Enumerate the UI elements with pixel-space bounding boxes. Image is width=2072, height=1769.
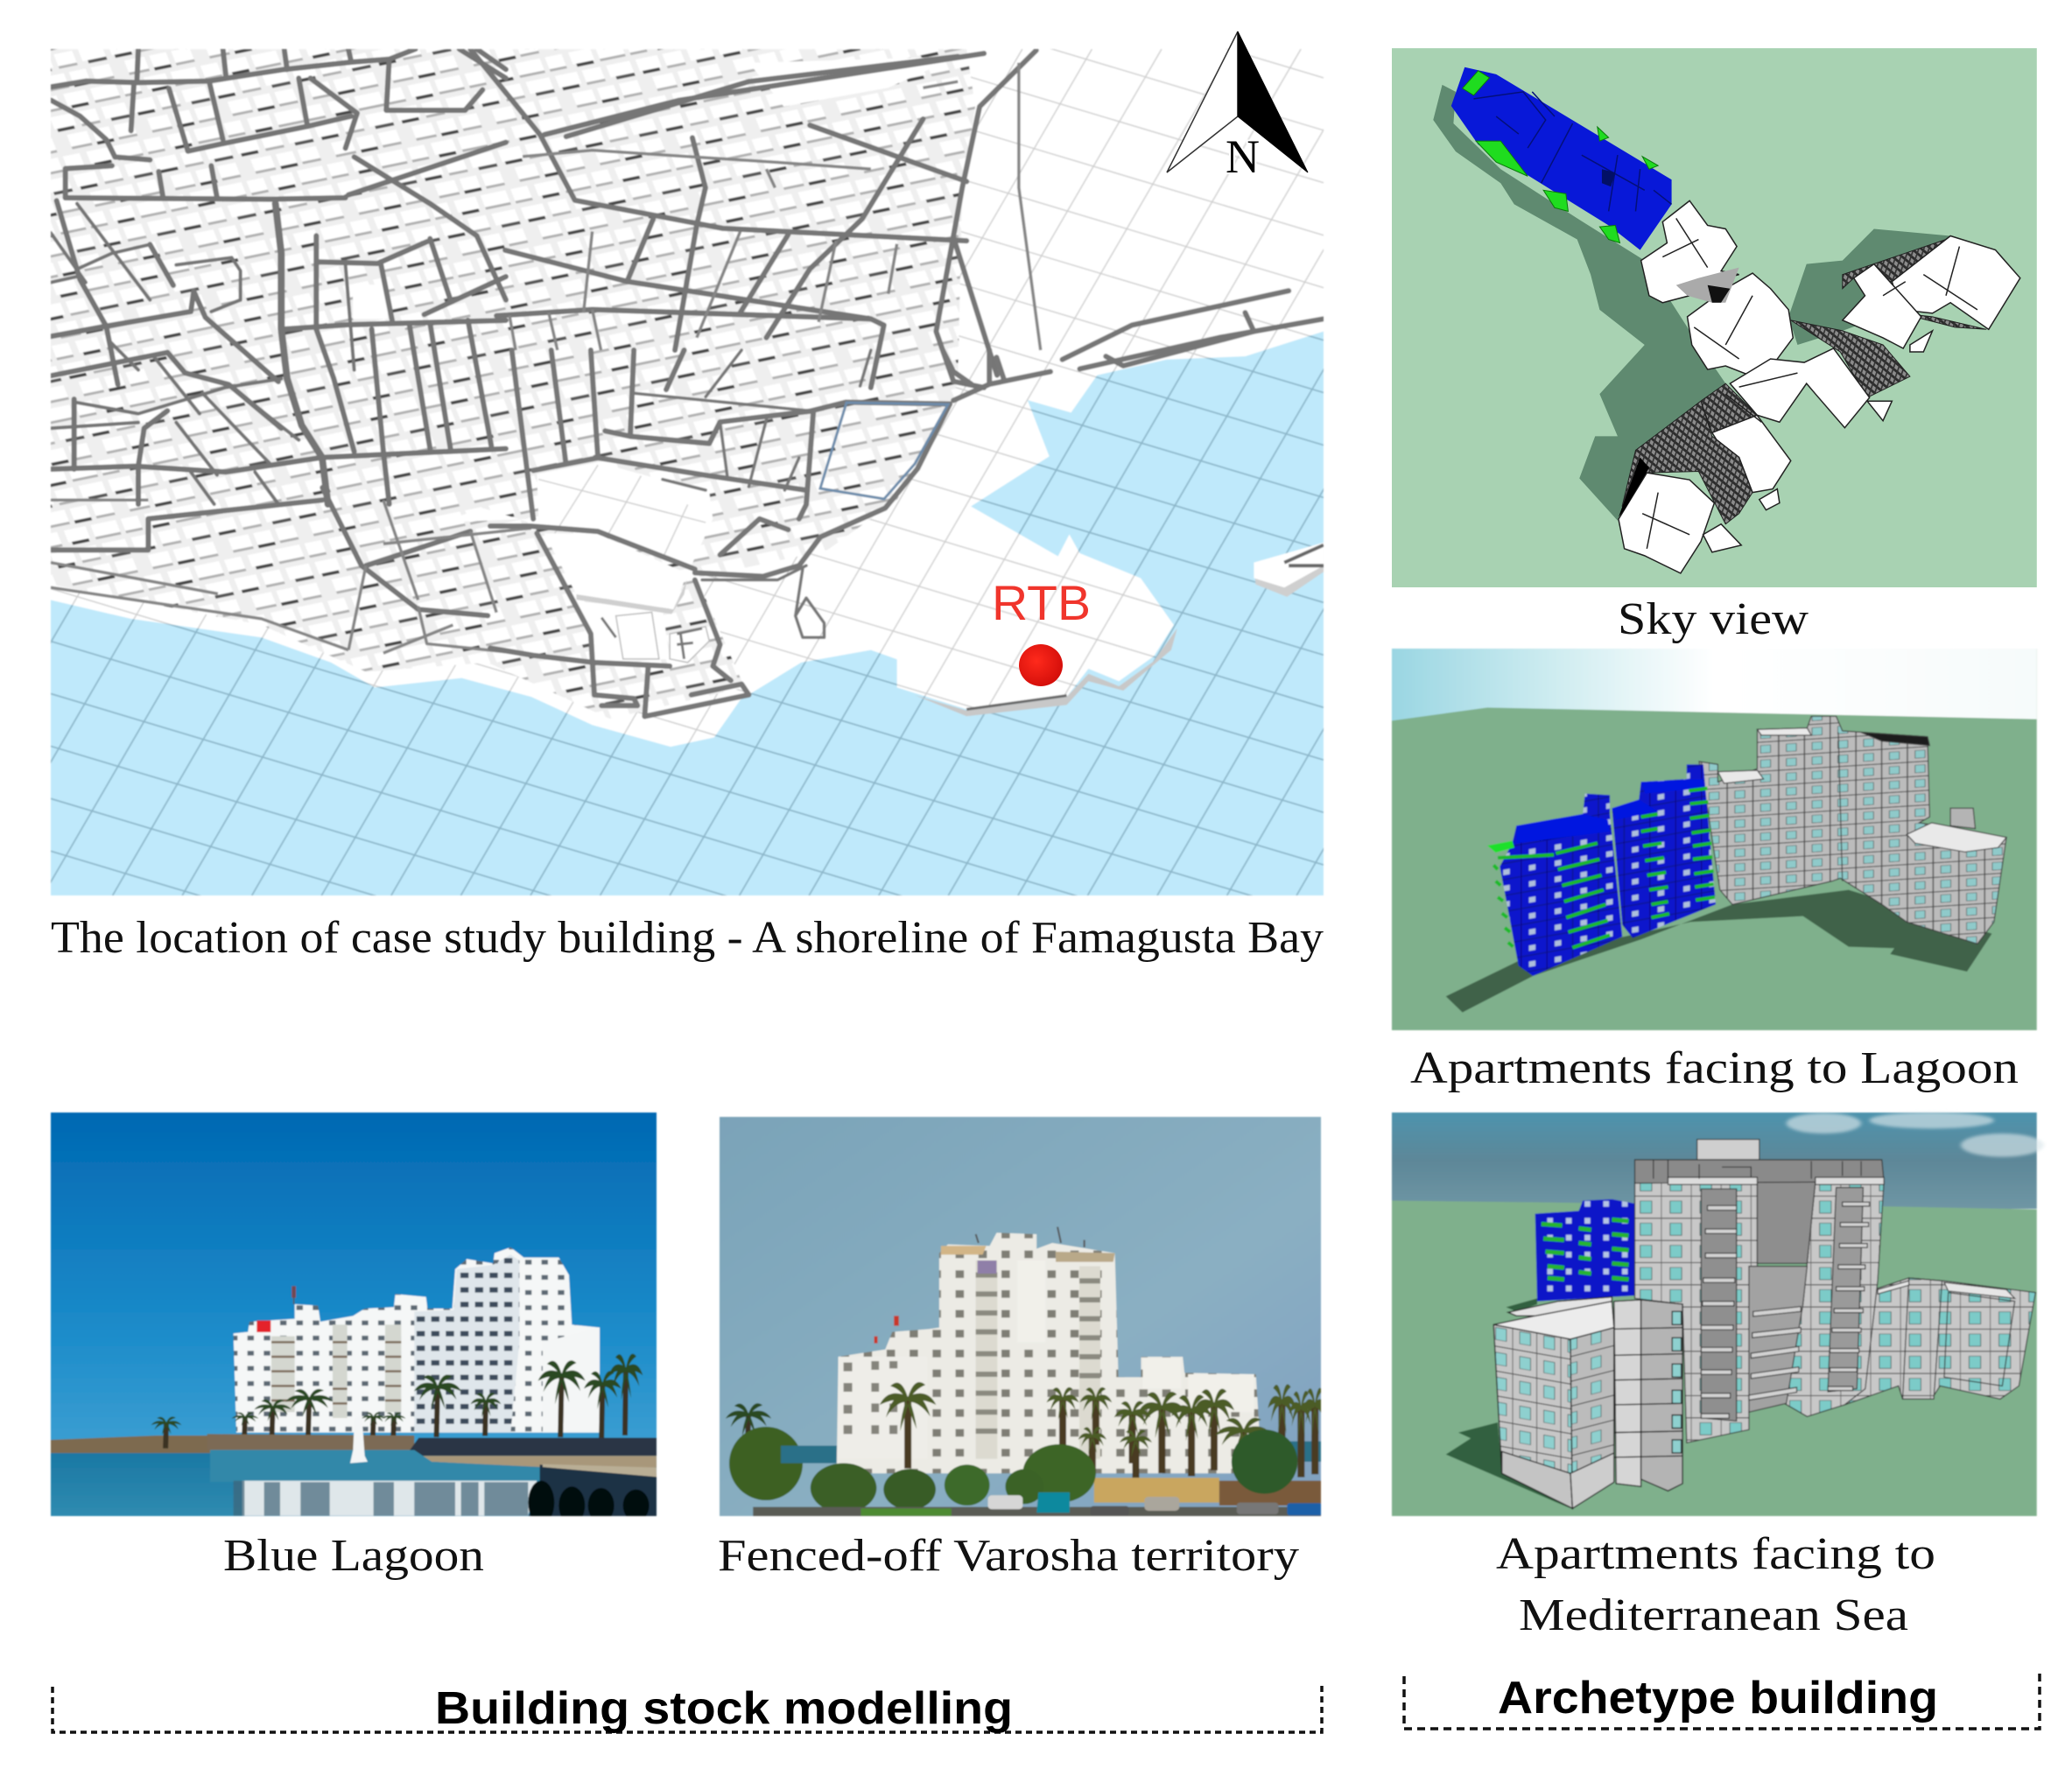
caption: Varosha: Fenced-off Varosha territory [718, 1531, 1299, 1581]
RTB location label: RTB [992, 575, 1091, 630]
right wing [1844, 1278, 2035, 1405]
bracket: Building stock modelling [53, 1682, 1322, 1734]
blue apartment block [1451, 67, 1672, 250]
left shore and water [50, 1452, 540, 1516]
panel: sky view model [1392, 48, 2037, 587]
photo: Blue Lagoon [51, 1113, 657, 1525]
icon: north arrow: N [1226, 130, 1260, 183]
hatched facades [1622, 240, 1986, 524]
palm row [880, 1382, 1327, 1485]
south harbour buildings [616, 612, 709, 663]
urban building fabric [50, 48, 976, 719]
pier [528, 1464, 657, 1517]
peninsula RTB site [915, 628, 1177, 716]
sea [50, 331, 1324, 896]
main tower [1635, 1140, 1884, 1443]
RTB location marker [1019, 644, 1063, 686]
front block [1493, 1297, 1682, 1508]
building shadow [1433, 85, 1950, 521]
statue [350, 1415, 368, 1464]
building [234, 1247, 600, 1433]
shadow of front block [1446, 1298, 1570, 1508]
panel: model facing lagoon [1392, 649, 2037, 1030]
photo: Varosha territory [720, 1117, 1327, 1517]
road network: upper right and south-west [51, 49, 1324, 615]
caption: Mediterranean model: Mediterranean Sea [1519, 1590, 1908, 1640]
shadow [1446, 890, 1992, 1013]
panel: location map of Famagusta Bay [50, 48, 1324, 896]
bracket: Archetype building [1404, 1673, 2040, 1729]
caption: sky view: Sky view [1618, 594, 1809, 644]
icon: north arrow [1167, 32, 1308, 183]
map grid on land [51, 49, 1324, 744]
blue block model [1487, 764, 1716, 976]
bracket: Archetype building: Archetype building [1498, 1673, 1938, 1723]
shore and sea wall [207, 1434, 414, 1450]
highlighted parcel outline [820, 403, 948, 499]
building [837, 1232, 1260, 1473]
cars [1036, 1492, 1070, 1513]
road network: eastern districts and coast road [490, 350, 1050, 716]
caption: Blue Lagoon: Blue Lagoon [223, 1531, 484, 1581]
small island at right [1255, 567, 1324, 597]
bracket: Building stock modelling: Building stock modelling [435, 1683, 1013, 1734]
palms [538, 1360, 586, 1437]
sea band [781, 1446, 851, 1464]
caption: lagoon model: Apartments facing to Lagoon [1410, 1043, 2019, 1093]
road network: western districts [51, 49, 506, 504]
grey tower model [1699, 716, 2006, 944]
caption: Mediterranean model: Apartments facing to [1496, 1529, 1935, 1579]
caption: map: The location of case study building - A shoreline of Famagusta Bay [51, 913, 1324, 963]
white roof blocks [1619, 200, 2020, 573]
wall, trees, ground [1094, 1478, 1219, 1503]
blue block behind [1535, 1199, 1637, 1302]
reflection [210, 1450, 540, 1482]
caption: Mediterranean model [1496, 1529, 1935, 1640]
balconies [1701, 1202, 1870, 1418]
cut-outs: open ground inside the city [440, 462, 713, 663]
panel: model facing Mediterranean Sea [1392, 1113, 2044, 1516]
